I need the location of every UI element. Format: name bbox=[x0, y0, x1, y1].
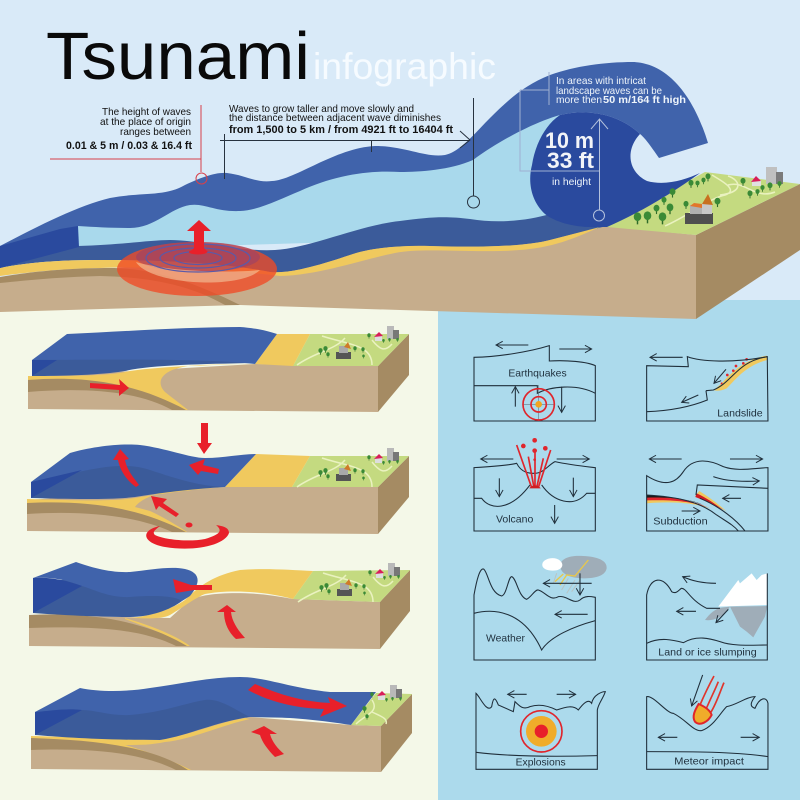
arrow: water sinks bbox=[197, 423, 212, 454]
stage 1: calm sea bbox=[28, 326, 409, 412]
callout: height at origin bbox=[50, 105, 207, 184]
stage 3: wave forms bbox=[29, 562, 410, 649]
cause: earthquakes bbox=[474, 345, 595, 421]
callout: intricate landscape: In areas with intricat bbox=[556, 75, 646, 87]
callout: wave growth and distance: Waves to grow taller and move slowly and bbox=[229, 103, 414, 115]
cause: weather: Weather bbox=[486, 634, 526, 645]
arrow: water inflow bbox=[189, 459, 219, 475]
cause: subduction: Subduction bbox=[653, 516, 708, 527]
callout: intricate landscape: more then bbox=[556, 94, 602, 106]
callout: intricate landscape bbox=[520, 72, 686, 171]
callout: wave growth and distance bbox=[220, 98, 480, 208]
icon: earthquake ring bbox=[146, 522, 229, 549]
callout: wave growth and distance: from 1,500 to 5 km / from 4921 ft to 16404 ft bbox=[229, 124, 453, 136]
arrow: wave rises bbox=[113, 449, 139, 487]
arrow: land uplift bbox=[251, 726, 284, 757]
cause: meteor impact bbox=[647, 675, 768, 769]
icon: city buildings and house bbox=[751, 167, 783, 186]
callout: height at origin: at the place of origin bbox=[100, 116, 191, 128]
arrow: plate push bbox=[90, 379, 129, 396]
hero roads bbox=[665, 175, 775, 226]
arrow: wave retreat bbox=[173, 579, 212, 593]
title: Tsunami bbox=[46, 19, 310, 94]
cause: land or ice slumping bbox=[647, 573, 767, 660]
callout: height at origin: 0.01 & 5 m / 0.03 & 16.4 ft bbox=[66, 140, 192, 152]
cause: explosions bbox=[476, 692, 605, 769]
cause: subduction bbox=[647, 459, 768, 531]
light water body bbox=[78, 108, 570, 250]
callout: wave height 10 m: 10 m bbox=[545, 128, 594, 153]
cause: earthquakes: Earthquakes bbox=[508, 368, 567, 379]
grass surface bbox=[607, 172, 800, 235]
cause: volcano bbox=[474, 438, 595, 531]
arrow: wave rising bbox=[187, 220, 211, 252]
stage 2: earthquake lift bbox=[27, 423, 409, 549]
arrow: wave surge bbox=[248, 684, 347, 717]
tectonic plate bbox=[0, 268, 240, 305]
land block front bbox=[0, 226, 696, 319]
seabed sand bbox=[0, 227, 600, 276]
lower sea layer bbox=[0, 214, 607, 272]
cause: volcano: Volcano bbox=[496, 514, 534, 525]
subtitle: infographic bbox=[313, 46, 496, 87]
callout: wave height 10 m: 33 ft bbox=[547, 148, 595, 173]
callout: intricate landscape: landscape waves can be bbox=[556, 85, 662, 97]
cause: landslide: Landslide bbox=[717, 409, 763, 420]
trees bbox=[634, 173, 782, 224]
callout: wave growth and distance: the distance between adjacent wave diminishes bbox=[229, 112, 441, 124]
arrow: land uplift bbox=[217, 605, 245, 639]
land block side bbox=[696, 184, 800, 319]
callout: wave height 10 m bbox=[545, 119, 608, 221]
cause: meteor impact: Meteor impact bbox=[674, 757, 744, 768]
breaking wave body bbox=[530, 112, 700, 227]
panel: tsunami stages background bbox=[0, 300, 438, 800]
hero diagram: tsunami cross-section bbox=[0, 62, 800, 319]
callout: intricate landscape: 50 m/164 ft high bbox=[603, 94, 686, 106]
callout: height at origin: The height of waves bbox=[102, 106, 191, 118]
wave left face bbox=[0, 226, 79, 268]
arrow: seabed uplift bbox=[151, 496, 179, 517]
panel: causes background bbox=[438, 300, 800, 800]
earthquake epicentre bbox=[117, 242, 277, 296]
callout: wave height 10 m: in height bbox=[552, 176, 591, 188]
cause: landslide bbox=[647, 356, 768, 421]
icon: castle bbox=[685, 194, 713, 224]
callout: height at origin: ranges between bbox=[120, 126, 191, 138]
stage 4: wave inundates bbox=[31, 677, 412, 772]
cause: explosions: Explosions bbox=[516, 757, 566, 768]
cause: land or ice slumping: Land or ice slumping bbox=[658, 647, 757, 658]
cause: weather bbox=[474, 556, 607, 660]
upper wave band bbox=[0, 62, 708, 268]
